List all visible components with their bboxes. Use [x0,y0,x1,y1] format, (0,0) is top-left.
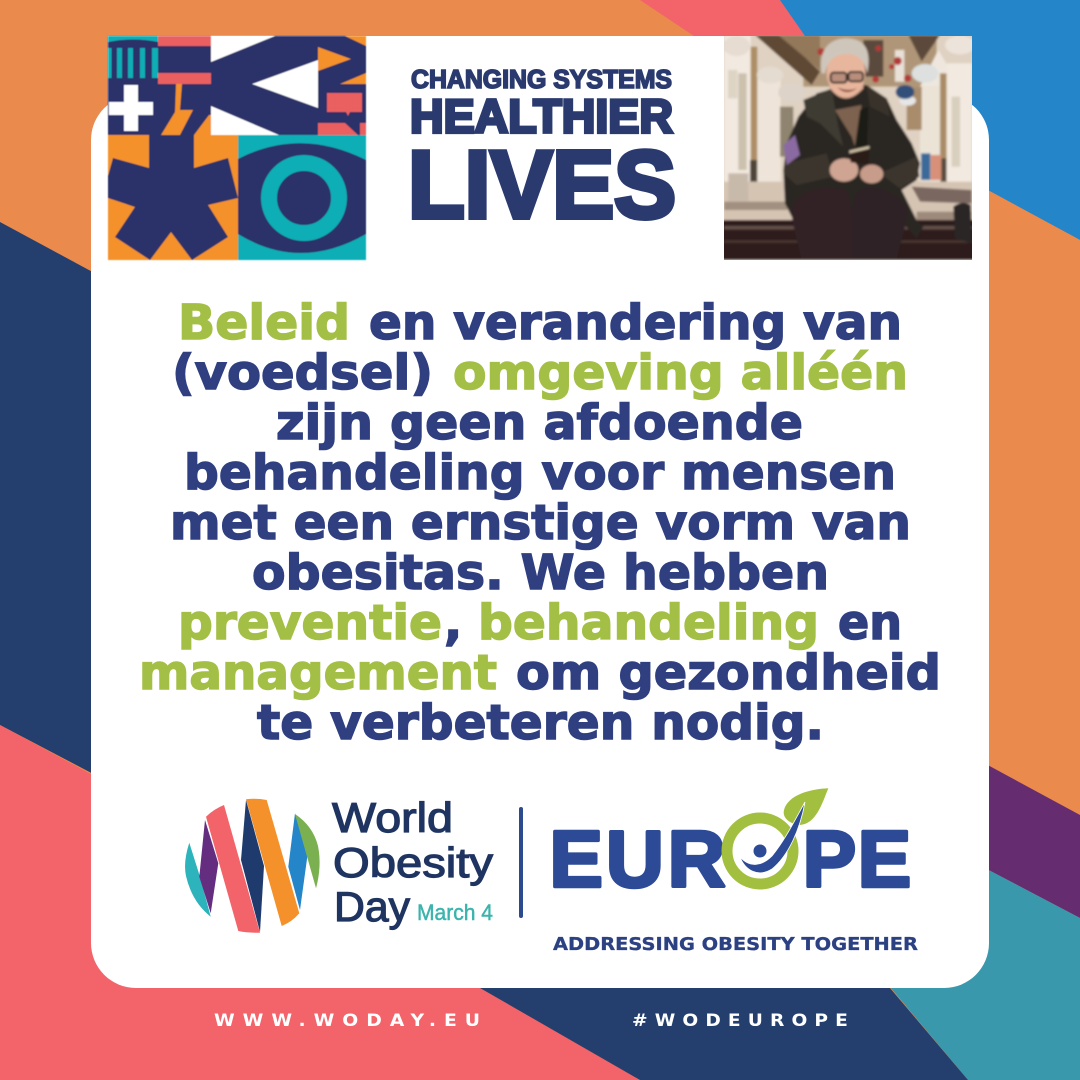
head [830,84,866,100]
icon: columns and plus [108,36,158,135]
shop signs and ornaments [723,36,975,180]
icon: eye [238,135,366,260]
line 1: en verandering van [369,295,902,351]
campaign heading: Changing Systems Healthier Lives: HEALTHIER [410,90,673,142]
line 1: Beleid [178,295,350,351]
divider [519,807,523,918]
footer: website: WWW.WODAY.EU [214,1011,488,1031]
logo: Europe [550,788,911,904]
white header strip [108,36,972,260]
wordmark: Obesity [333,839,493,886]
line 3: zijn geen afdoende [276,395,803,451]
floor [724,182,972,222]
arcade upper wall [803,35,937,87]
campaign heading: Changing Systems Healthier Lives: CHANGING SYSTEMS [411,66,672,94]
logo: World Obesity Day [185,794,493,933]
wordmark: World [332,794,453,841]
icon: ribbon circle [185,799,320,933]
line 6: obesitas. We hebben [252,545,829,601]
line 8: om gezondheid [516,645,941,701]
line 8 [139,645,941,701]
wordmark letters: PE [803,814,911,904]
campaign heading: Changing Systems Healthier Lives: LIVES [408,132,676,238]
main message [139,295,941,751]
hands and phone [830,158,858,182]
bench [720,220,980,260]
wordmark [332,794,493,930]
line 7: , [444,595,462,651]
icon: coral bands and orange figure [158,36,211,135]
white rounded card [91,95,989,988]
line 2: omgeving alléén [453,345,908,401]
line 9: te verbeteren nodig. [257,695,824,751]
icon: green O with leaf and figure [727,788,828,884]
line 2 [172,345,908,401]
line 2: (voedsel) [172,345,433,401]
right wall [920,87,940,183]
wordmark letters [550,814,911,904]
footer: hashtag: #WODEUROPE [632,1011,855,1031]
photo: woman sitting on a bench using her phone [724,36,972,260]
campaign heading: Changing Systems Healthier Lives [408,66,676,238]
line 7: behandeling [478,595,819,651]
line 7: preventie [178,595,442,651]
wordmark letters: EUR [550,814,725,904]
header graphic: health icons mosaic [108,36,366,260]
date: March 4 [417,900,493,925]
icon: asterisk [108,135,238,260]
line 8: management [139,645,497,701]
jacket [783,85,923,238]
line 5: met een ernstige vorm van [170,495,911,551]
wordmark: Day [334,883,410,930]
line 7 [178,595,902,651]
line 7: en [838,595,902,651]
legs [792,217,853,258]
tagline: ADDRESSING OBESITY TOGETHER [553,935,919,955]
left wall [724,35,751,185]
line 4: behandeling voor mensen [184,445,896,501]
icon: megaphone arrow [211,36,366,135]
